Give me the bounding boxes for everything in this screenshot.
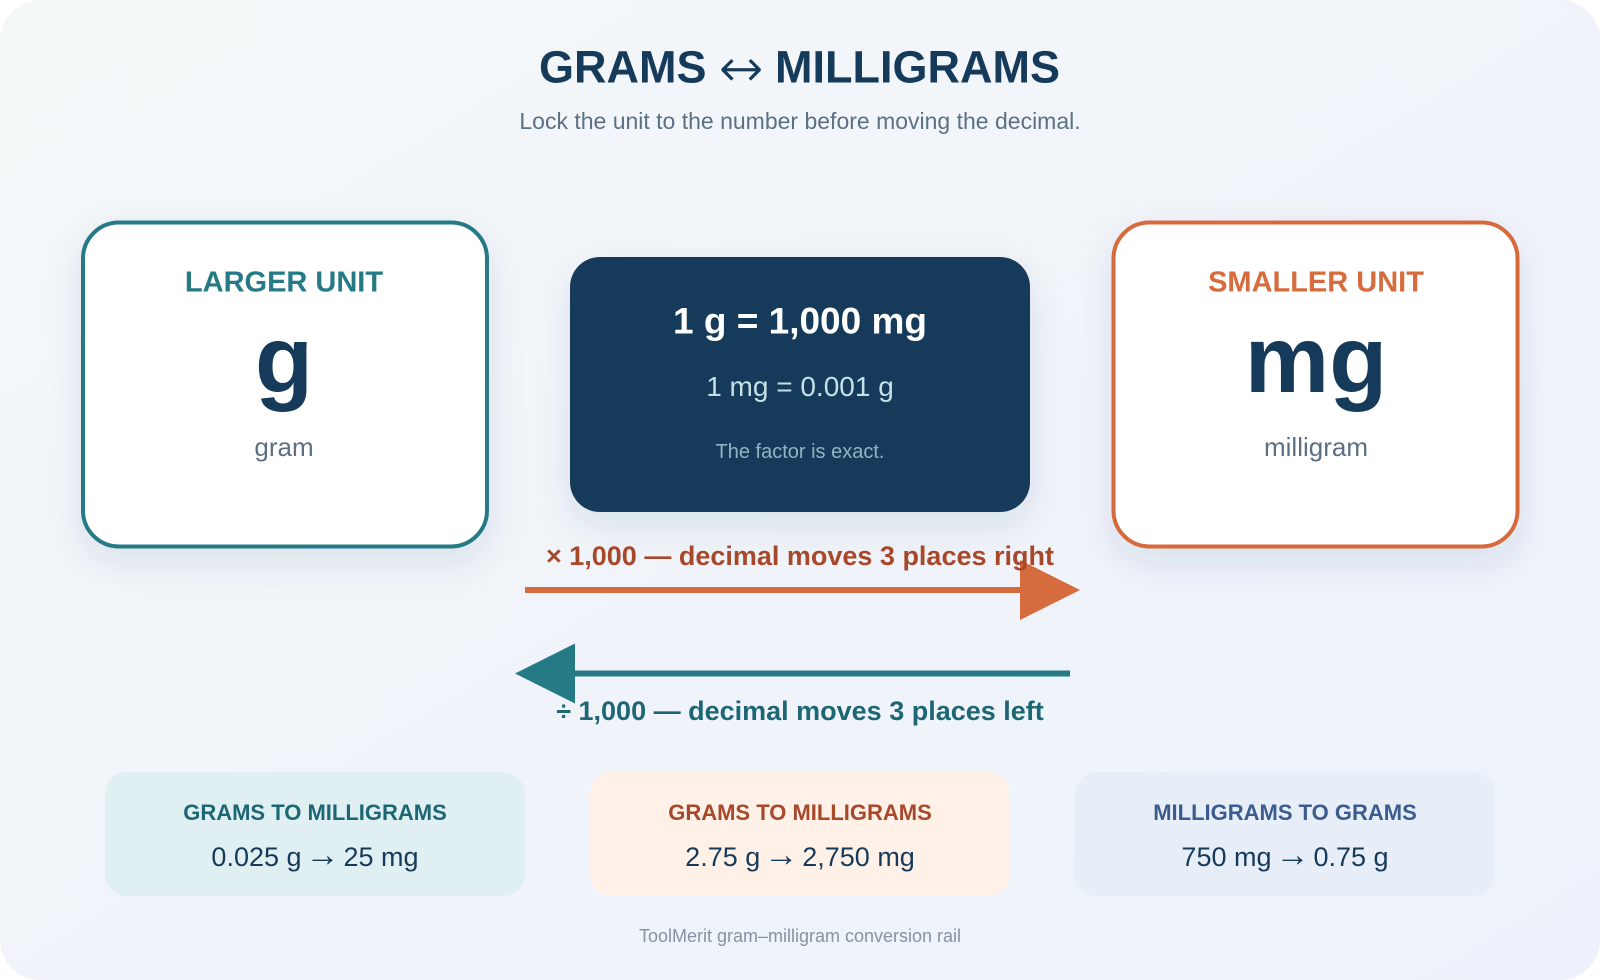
subtitle: Lock the unit to the number before moving the decimal.	[519, 108, 1081, 134]
unit name: milligram: milligram	[1264, 432, 1368, 462]
arrow label: multiply: × 1,000 — decimal moves 3 places right	[546, 541, 1054, 571]
footer: ToolMerit gram–milligram conversion rail	[639, 926, 961, 946]
title	[539, 36, 1060, 100]
unit name: gram: gram	[254, 432, 314, 462]
example card: 0.025 g	[105, 772, 525, 896]
label: larger unit: LARGER UNIT	[185, 266, 383, 298]
title: ↔	[718, 36, 764, 100]
example value: 750 mg → 0.75 g	[1181, 836, 1389, 874]
title: GRAMS	[539, 42, 706, 92]
unit symbol: g: g	[255, 307, 313, 413]
arrow label: divide: ÷ 1,000 — decimal moves 3 places left	[556, 696, 1044, 726]
arrow: grams to milligrams	[525, 560, 1080, 620]
panel: conversion factor	[570, 257, 1030, 512]
example heading: GRAMS TO MILLIGRAMS	[183, 800, 447, 825]
factor note: The factor is exact.	[716, 441, 884, 463]
example value: 2.75 g → 2,750 mg	[685, 836, 915, 874]
title: MILLIGRAMS	[775, 42, 1060, 92]
panel: larger unit	[83, 222, 487, 546]
unit symbol: mg: mg	[1245, 307, 1387, 413]
panel: smaller unit	[1114, 222, 1518, 546]
arrow: milligrams to grams	[515, 644, 1070, 704]
example value: 0.025 g → 25 mg	[211, 836, 419, 874]
label: smaller unit: SMALLER UNIT	[1208, 266, 1424, 298]
example heading: MILLIGRAMS TO GRAMS	[1153, 800, 1417, 825]
inverse equation: 1 mg = 0.001 g	[706, 371, 894, 402]
main equation: 1 g = 1,000 mg	[673, 300, 927, 342]
example heading: GRAMS TO MILLIGRAMS	[668, 800, 932, 825]
example card: 2.75 g	[590, 772, 1010, 896]
example card: 750 mg	[1075, 772, 1495, 896]
